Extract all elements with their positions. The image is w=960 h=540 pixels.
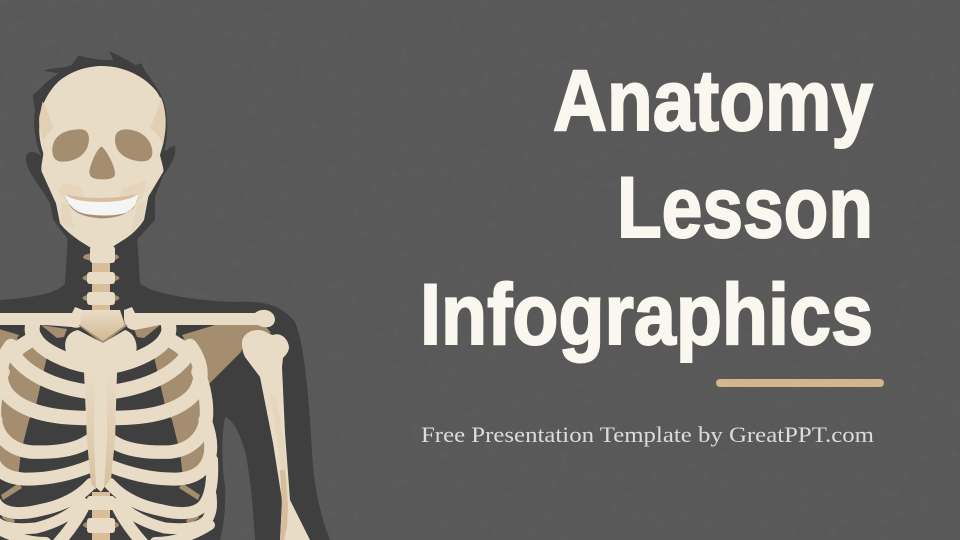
- upper vertebrae: [82, 246, 120, 312]
- title line: Anatomy: Anatomy: [553, 53, 873, 149]
- left eye socket: [52, 129, 89, 162]
- scapula back shapes: [0, 322, 271, 394]
- nose: [89, 147, 115, 179]
- ribs tan back shapes: [0, 325, 212, 525]
- jaw shading: [61, 203, 75, 228]
- accent bar: [716, 379, 884, 387]
- spine: [78, 246, 128, 540]
- ribs: [0, 322, 212, 540]
- humerus: [242, 330, 310, 540]
- body silhouette shadow: [0, 235, 330, 540]
- skull bone: [39, 66, 165, 247]
- right eye socket: [115, 129, 152, 161]
- title line: Infographics: Infographics: [420, 267, 873, 363]
- manubrium: [78, 325, 128, 344]
- upper jaw band: [66, 193, 138, 202]
- sternum: [65, 330, 137, 492]
- teeth: [68, 203, 135, 218]
- hair and head shadow: [26, 51, 175, 280]
- temple shading: [39, 102, 54, 140]
- title line: Lesson: Lesson: [617, 160, 873, 256]
- skull: [39, 66, 166, 247]
- illustration: skeleton: [0, 51, 330, 540]
- lower vertebrae: [83, 492, 119, 540]
- title: [420, 53, 873, 363]
- subtitle: Free Presentation Template by GreatPPT.com: [421, 422, 874, 447]
- cheek shading: [57, 183, 85, 199]
- clavicles: [0, 307, 275, 330]
